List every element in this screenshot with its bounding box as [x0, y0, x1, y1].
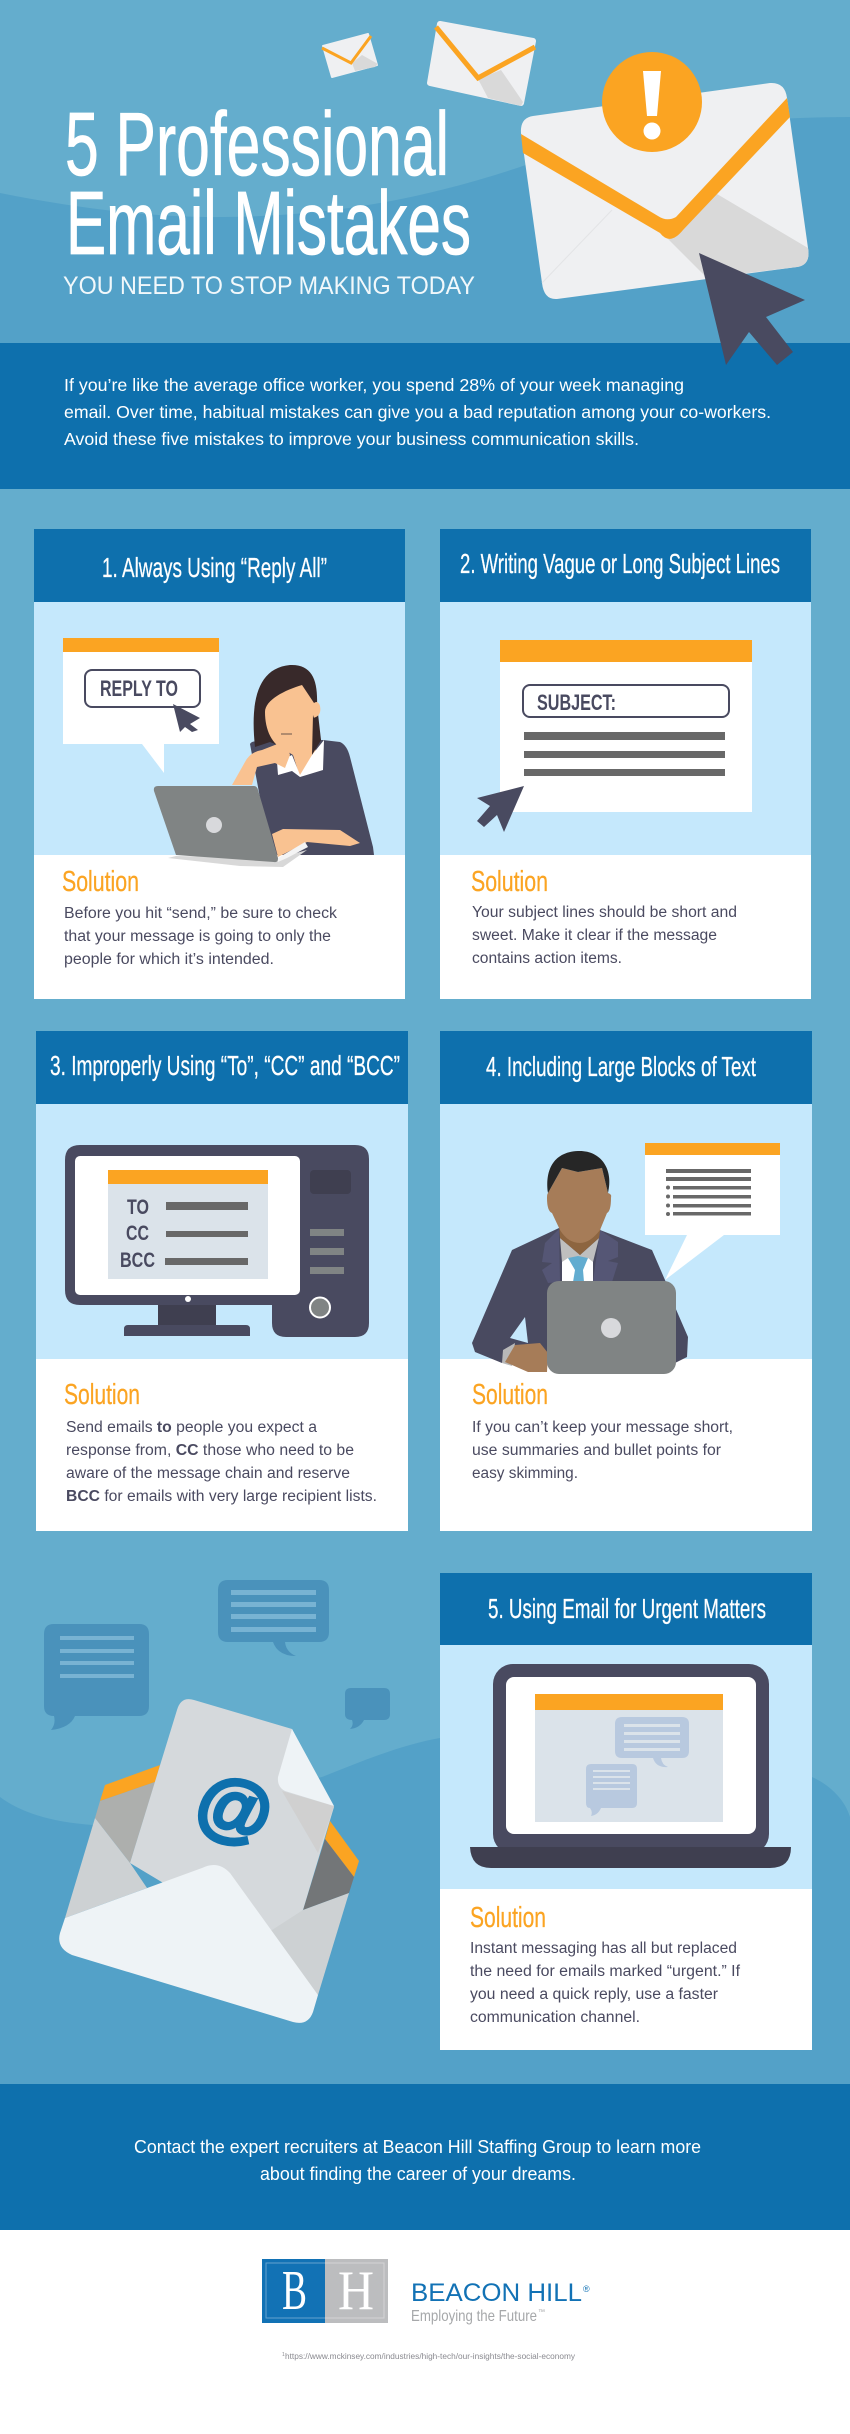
- icon: medium envelope: [430, 24, 535, 106]
- text: solution 2: contains action items.: [472, 950, 622, 967]
- logo: Beacon Hill: Employing the Future: [411, 2308, 537, 2325]
- text: solution 2: [472, 904, 737, 967]
- text: solution 3: [66, 1419, 377, 1505]
- subtitle: YOU NEED TO STOP MAKING TODAY: [63, 272, 475, 300]
- text: solution 1: [64, 905, 337, 968]
- text: solution 3: response from, CC those who need to be: [66, 1442, 354, 1459]
- icon: large cursor arrow: [699, 253, 805, 365]
- logo: Beacon Hill: ™: [538, 2309, 545, 2316]
- logo: Beacon Hill: [262, 2259, 590, 2325]
- contact band: [0, 2084, 850, 2230]
- illustration: woman at laptop: [154, 665, 374, 867]
- text: solution 1: people for which it’s intended.: [64, 951, 274, 968]
- text: solution 5: [470, 1940, 741, 2026]
- contact band: about finding the career of your dreams.: [260, 2164, 576, 2184]
- text: solution 5: communication channel.: [470, 2009, 640, 2026]
- text: solution 5: you need a quick reply, use a faster: [470, 1986, 718, 2003]
- icon: chat bubble top: [218, 1580, 329, 1656]
- text: solution 3: aware of the message chain and reserve: [66, 1465, 350, 1482]
- text: solution 3: BCC for emails with very large recipient lists.: [66, 1488, 377, 1505]
- illustration: desktop computer: CC: [126, 1222, 149, 1245]
- speech bubble: reply to: [63, 638, 219, 773]
- heading: solution 5: Solution: [470, 1902, 546, 1934]
- icon: chat bubble left: [44, 1624, 149, 1730]
- heading: solution 2: Solution: [471, 866, 548, 898]
- text: solution 2: Your subject lines should be short and: [472, 904, 737, 921]
- illustration: subject window: [477, 640, 752, 832]
- panel: card 1: [34, 529, 405, 999]
- text: solution 5: the need for emails marked “urgent.” If: [470, 1963, 741, 1980]
- footer background: [0, 2230, 850, 2434]
- speech bubble: bulleted text: [645, 1143, 780, 1280]
- illustration: subject window: SUBJECT:: [537, 690, 616, 715]
- heading: card 3: 3. Improperly Using “To”, “CC” and “BCC”: [50, 1050, 400, 1081]
- logo: Beacon Hill: BEACON HILL: [411, 2279, 582, 2307]
- illustration: desktop computer: [65, 1145, 369, 1337]
- title: 5 Professional: [65, 95, 449, 195]
- panel: card 3: [36, 1031, 408, 1531]
- text: solution 1: that your message is going to only the: [64, 928, 331, 945]
- illustration: laptop with chat: [470, 1664, 791, 1868]
- icon: at sign: @: [188, 1757, 281, 1858]
- logo: Beacon Hill: B: [282, 2260, 307, 2322]
- text: solution 1: Before you hit “send,” be sure to check: [64, 905, 337, 922]
- intro band: [0, 343, 850, 489]
- text: solution 4: use summaries and bullet points for: [472, 1442, 721, 1459]
- heading: solution 3: Solution: [64, 1379, 140, 1411]
- icon: chat bubble small: [345, 1688, 390, 1729]
- title: Email Mistakes: [66, 174, 471, 274]
- title: [65, 95, 471, 274]
- text: solution 4: easy skimming.: [472, 1465, 578, 1482]
- icon: small envelope: [322, 34, 378, 77]
- speech bubble: reply to: REPLY TO: [100, 676, 178, 701]
- heading: solution 1: Solution: [62, 866, 139, 898]
- intro band: If you’re like the average office worker, you spend 28% of your week managing: [64, 375, 684, 395]
- logo: Beacon Hill: ®: [583, 2284, 590, 2294]
- alert badge: [602, 52, 702, 152]
- illustration: open envelope with at sign: [59, 1699, 359, 2023]
- panel: card 5: [440, 1573, 812, 2050]
- footnote: 1: [282, 2352, 285, 2358]
- text: solution 3: Send emails to people you expect a: [66, 1419, 317, 1436]
- illustration: desktop computer: TO: [127, 1196, 149, 1219]
- panel: card 4: [440, 1031, 812, 1531]
- logo: Beacon Hill: H: [338, 2260, 374, 2322]
- footnote: https://www.mckinsey.com/industries/high-tech/our-insights/the-social-economy: [285, 2351, 576, 2361]
- heading: solution 4: Solution: [472, 1379, 548, 1411]
- illustration: desktop computer: BCC: [120, 1249, 155, 1272]
- heading: card 1: 1. Always Using “Reply All”: [102, 552, 327, 583]
- panel: card 2: [440, 529, 811, 999]
- intro band: email. Over time, habitual mistakes can give you a bad reputation among your co-workers.: [64, 402, 771, 422]
- intro band: Avoid these five mistakes to improve your business communication skills.: [64, 429, 639, 449]
- text: solution 2: sweet. Make it clear if the message: [472, 927, 717, 944]
- contact band: Contact the expert recruiters at Beacon Hill Staffing Group to learn more: [134, 2137, 701, 2157]
- icon: large envelope with alert: [521, 52, 809, 299]
- text: solution 5: Instant messaging has all but replaced: [470, 1940, 737, 1957]
- text: solution 4: [472, 1419, 733, 1482]
- text: solution 4: If you can’t keep your message short,: [472, 1419, 733, 1436]
- illustration: man at laptop: [472, 1151, 688, 1374]
